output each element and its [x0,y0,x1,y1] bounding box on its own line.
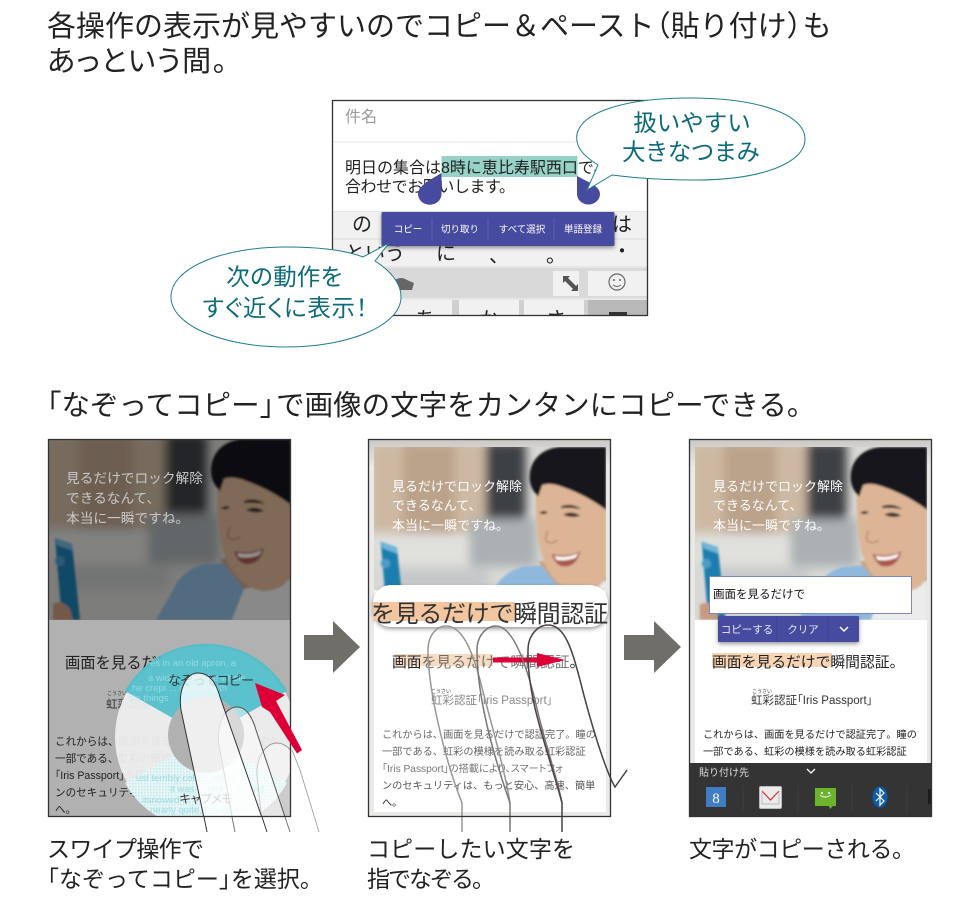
icon: google [706,787,726,807]
red trace arrow [493,653,565,667]
keyboard: あ [415,309,435,331]
swipe wheel menu: キャプメモ [179,792,233,806]
keyboard: 。 [546,245,566,267]
photo caption: 見るだけでロック解除 [66,471,203,486]
red swipe arrow [255,683,302,754]
swipe wheel menu: なぞってコピー [168,673,254,688]
icon: google: 8 [712,791,720,807]
article text: こうさい [107,690,127,697]
article text [55,656,160,814]
photo caption: できるなんて、 [66,491,160,506]
heading: trace to copy: 「なぞってコピー」で画像の文字をカンタンにコピーできる。 [33,390,815,422]
article text: 虹彩認証「Iris Passport」 [106,698,227,711]
arrow: step 2 to 3 [624,621,681,673]
article text: 「Iris Passport」の搭載により、スマートフォ [55,769,244,782]
article text with highlight: 画面を見るだけで瞬間認証。 [712,654,904,671]
title: copy and paste: 各操作の表示が見やすいのでコピー＆ペースト（貼り付け）も [47,10,832,43]
arrow: step 1 to 2 [304,621,360,673]
photo caption: 本当に一瞬ですね。 [713,518,830,533]
magnifier loupe: を見るだけで瞬間認証 [371,601,608,628]
faint text behind wheel: ust terribly cold ... other [136,773,235,784]
swipe wheel menu [115,644,290,816]
caption: step 2: 指でなぞる。 [367,866,495,892]
article text with highlight: 「Iris Passport」の搭載により、スマートフォ [382,762,563,775]
context menu: すべて選択 [499,224,546,236]
share bar: 貼り付け先 [699,766,749,779]
keyboard: 、 [489,245,509,267]
fingers outline [428,625,627,832]
icon: bluetooth [872,786,888,808]
callout: next action shown nearby: すぐ近くに表示！ [202,295,368,321]
faint text behind wheel: itsnowed ... [142,795,190,806]
email body text [346,159,596,194]
article text with highlight [703,653,917,758]
article text with highlight: 虹彩認証「Iris Passport」 [751,694,872,707]
article text: 画面を見るだけで瞬間認証。 [65,655,264,672]
article text with highlight: 画面を見るだけで瞬間認証。 [392,654,584,671]
photo caption: 見るだけでロック解除 [713,479,843,494]
photo caption [392,479,522,533]
article text: これからは、画面を見るだけで認証完了。瞳の [55,736,277,748]
callout: easy-to-handle grips: 扱いやすい [633,110,751,136]
callout: next action shown nearby [171,243,401,347]
magnifier loupe [371,585,608,628]
subject field label: 件名 [345,108,377,126]
photo: man with phone (dimmed) [43,434,291,620]
title: copy and paste [47,10,832,78]
photo caption: できるなんて、 [392,498,481,513]
callout: next action shown nearby: 次の動作を [226,264,344,290]
faint text behind wheel: it was ... laid ... by and [170,784,264,795]
caption: step 2 [367,836,575,892]
caption: step 1: スワイプ操作で [47,836,204,862]
photo caption: できるなんて、 [713,498,802,513]
article text with highlight: これからは、画面を見るだけで認証完了。瞳の [382,729,596,741]
callout: easy-to-handle grips: 大きなつまみ [622,139,760,165]
panel: step 3 copied text [689,439,932,817]
context menu: 切り取り [441,224,479,236]
context menu: コピー [394,224,422,236]
article text with highlight: 虹彩認証「Iris Passport」 [431,694,552,707]
photo caption: 本当に一瞬ですね。 [66,511,189,526]
faint text behind wheel: he crept ... mbling with [132,683,227,694]
caption: step 1 [36,836,323,892]
photo caption: 見るだけでロック解除 [392,479,522,494]
photo caption [713,479,843,533]
faint text behind wheel: ttle things [128,693,169,704]
context menu: 単語登録 [564,224,602,236]
context menu [382,212,614,246]
copy toolbar: クリア [787,624,819,636]
article text with highlight: こうさい [431,688,451,695]
email body text: 合わせでお願いします。 [345,178,515,196]
photo caption: 本当に一瞬ですね。 [392,518,509,533]
copy toolbar [718,616,859,642]
faint text behind wheel: nearly quite, though I it [150,805,246,816]
callout: easy-to-handle grips [577,98,805,190]
keyboard: に [436,243,456,265]
article text with highlight [382,654,596,809]
keyboard: は [612,214,632,236]
keyboard: さ [546,309,566,331]
article text: ンのセキュリティは、もっと安心、高速、簡単 [55,786,277,799]
photo caption [66,471,203,526]
share bar [689,763,932,817]
fingers beyond panel edge [204,750,319,832]
keyboard: か [479,309,499,331]
caption: step 3: 文字がコピーされる。 [689,836,915,862]
selection handles [418,173,600,205]
panel: email selection screenshot [333,108,647,315]
title: copy and paste: あっという間。 [47,46,227,78]
copied text card: 画面を見るだけで [713,588,805,601]
faint text behind wheel: a wide ... her the whole [148,673,246,684]
icon: messaging [815,788,836,809]
faint text behind wheel: es in an old apron, a [150,658,237,669]
article text with highlight: これからは、画面を見るだけで認証完了。瞳の [703,729,917,741]
copied text card [710,576,912,614]
panel: step 1 swipe menu [43,434,319,832]
article text with highlight: 一部である、虹彩の模様を読み取る虹彩認証 [703,745,907,758]
article text with highlight: ンのセキュリティは、もっと安心、高速、簡単 [382,779,595,792]
panel: step 2 trace text [368,439,627,832]
faint text behind wheel [128,658,264,816]
caption: step 1: 「なぞってコピー」を選択。 [36,866,323,892]
selected text highlight [442,156,578,177]
keyboard [333,211,647,315]
article text: へ。 [55,804,76,816]
caption: step 2: コピーしたい文字を [367,836,575,862]
keyboard: の [352,214,372,236]
fingers [180,672,290,816]
article text with highlight: 一部である、虹彩の模様を読み取る虹彩認証 [382,745,586,758]
icon: mail [760,786,782,808]
article text: 一部である、虹彩の模様を読み取る虹彩認証 [55,752,267,765]
article text with highlight: へ。 [382,798,402,809]
email body text: 明日の集合は8時に恵比寿駅西口で、 [345,159,609,177]
article text with highlight: こうさい [752,688,772,695]
photo: man with phone [369,442,606,620]
keyboard: という [345,243,405,265]
copy toolbar: コピーする [721,624,773,636]
photo: man with phone [690,442,927,620]
keyboard: ・ [612,241,632,263]
